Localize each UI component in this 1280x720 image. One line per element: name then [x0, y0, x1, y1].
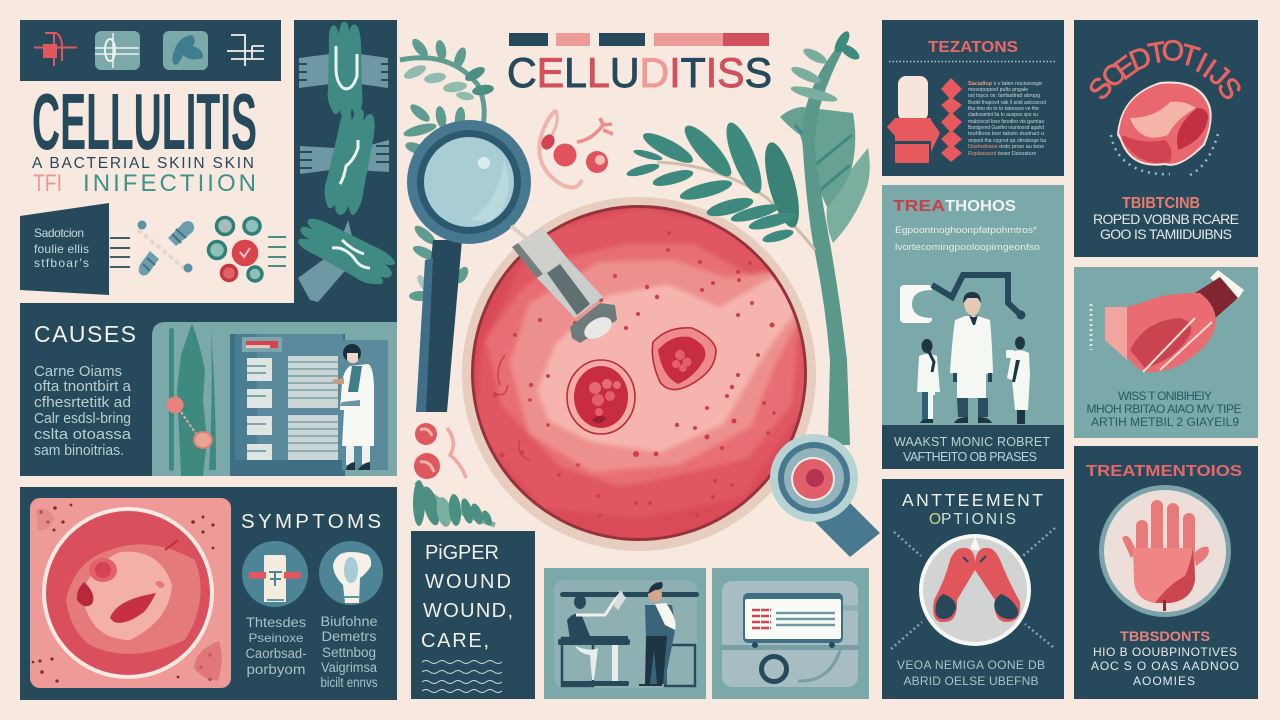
illustration: central skin circle: [460, 197, 820, 551]
illustration: affected tissue: [1117, 81, 1212, 166]
illustration: infected hand: [1105, 270, 1244, 372]
text: symptom one: [246, 615, 306, 677]
subtitle line one: A BACTERIAL SKIIN SKIN: [32, 155, 254, 172]
heading: symptoms: SYMPTOMS: [241, 510, 381, 533]
panel: treatment options hand: [1074, 446, 1258, 699]
callout: bacterial note: foulie ellis: [34, 242, 89, 256]
text: small body copy: Bantgrend Gantho rsuntoosd agahd: [968, 125, 1044, 131]
skin speckles: [492, 231, 776, 517]
heading: treathohos: THOHOS: [945, 198, 1016, 215]
heading: arched title: J: [1203, 59, 1235, 93]
text: symptom two: [320, 614, 378, 690]
text: wound care heading: CARE,: [421, 630, 489, 652]
icon: paired swollen limbs: [919, 534, 1031, 646]
illustration: skin lesion card: [30, 498, 231, 688]
illustration: medical team: [900, 275, 1030, 424]
subtitle line two: TFI: [33, 170, 62, 197]
text: small body copy: cladosantot lla tu auopos spo su: [968, 112, 1038, 118]
text: causes body: cslta otoassa: [34, 427, 132, 443]
icon: teal joint card: [95, 31, 140, 70]
text: small body copy: touhlloos loor tabsto dustract u: [968, 131, 1044, 137]
dotted divider: [889, 60, 1055, 62]
heading: arched title: C: [1095, 57, 1133, 95]
lesion: right: [652, 328, 716, 390]
footer band: [882, 425, 1064, 469]
text: symptom one: Caorbsad-: [246, 646, 306, 661]
right assistant: [1006, 336, 1030, 424]
text: symptom two: Vaigrimsa: [321, 660, 377, 675]
panel: monitor device: [712, 568, 869, 699]
text: symptom two: bicilt ennvs: [320, 675, 378, 690]
icon: bulb swelling circle: [319, 541, 383, 605]
text: causes body: ofta tnontbirt a: [34, 379, 132, 395]
panel: treatments with doctors: [882, 185, 1064, 469]
text: small body copy: mosopopsed pults pngale: [968, 87, 1028, 93]
heading: arched title: E: [1109, 50, 1143, 87]
text: treatment footer: [894, 435, 1050, 464]
icon: glove three: [298, 218, 396, 302]
icon: red anatomy cross: [34, 33, 77, 66]
wave lines: [422, 660, 502, 692]
icon: white line diagram: [227, 35, 264, 66]
callout: bacterial note: stfboar's: [34, 256, 89, 270]
icon: red blood cells: [414, 423, 466, 479]
heading: centre title: CELLUDITISS: [507, 49, 772, 96]
panel: causes: [20, 303, 397, 476]
heading: treatmentoios: TREATMENTOIOS: [1086, 463, 1242, 480]
text: CELLULITIS: [32, 77, 257, 166]
text: causes body: cfhesrtetitk ad: [34, 395, 131, 411]
text: small body copy: osl tnpcs os: tanfastlrad abrupg: [968, 93, 1040, 99]
text: options footer: ABRID OELSE UBEFNB: [904, 674, 1038, 688]
text: tbbsdonts subheading: TBBSDONTS: [1120, 628, 1210, 644]
panel: stedtotiis: [1074, 20, 1258, 257]
skin layers: [474, 208, 804, 538]
text: symptom two: Biufohne: [320, 614, 378, 629]
dotted ticks: [1090, 304, 1092, 350]
heading: teatons: TEZATONS: [928, 39, 1018, 56]
panel: glove illustrations: [292, 20, 400, 303]
text: treatments intro: Egpoontnoghoonpfatpohmtros*: [895, 225, 1037, 236]
heading: arched title: D: [1125, 41, 1156, 78]
panel: hand lesion: [1074, 267, 1258, 438]
icon: teal anatomy card: [163, 31, 208, 70]
callout: bacterial note: Sadotcion: [34, 226, 84, 240]
title bars: [509, 33, 769, 46]
text: treatment options body: [1091, 645, 1239, 688]
text: small body copy: Bodel thapovd raik ll aoid astcoscod: [968, 100, 1046, 106]
text: small body copy: onpool tha cogrod qa obralsoge ba: [968, 138, 1047, 144]
panel: care consultation: [544, 568, 706, 699]
heading: arched title: T: [1146, 36, 1169, 71]
text: symptom two: Demetrs: [322, 629, 377, 644]
text: wound care heading: WOUND: [425, 571, 511, 593]
dotted orbit: [1111, 130, 1219, 175]
heading: options: O: [929, 511, 941, 528]
illustration: right plant: [780, 29, 870, 445]
text: stedtotiis body: ROPED VOBNB RCARE: [1093, 211, 1239, 227]
illustration: small fern: [413, 480, 495, 528]
text: treatment footer: WAAKST MONIC ROBRET: [894, 435, 1050, 449]
heading: arched title: S: [1210, 72, 1247, 106]
text: treatment options body: AOC S O OAS AADNOO: [1091, 659, 1239, 673]
illustration: left fern: [400, 36, 495, 301]
text: treatment options body: AOOMIES: [1133, 674, 1195, 688]
heading: arched title: O: [1161, 35, 1185, 68]
illustration: right leaf branch: [625, 119, 815, 250]
panel: top icon strip: [20, 20, 281, 81]
text: options footer: [897, 658, 1045, 688]
text: causes body: [34, 364, 132, 459]
text: hand caption: WISS T ONIBIHEIY: [1118, 389, 1212, 403]
text: small body copy: [968, 81, 1047, 157]
panel: teatons: [882, 20, 1064, 176]
text: stedtotiis body: [1093, 211, 1239, 242]
central doctor: [950, 292, 993, 423]
text: hand caption: MHOH RBITAO AIAO MV TIPE: [1086, 402, 1242, 416]
text: options footer: VEOA NEMIGA OONE DB: [897, 658, 1045, 672]
dotted rays: [891, 528, 1055, 649]
heading: arched title: S: [1083, 71, 1120, 106]
text: hand caption: [1086, 389, 1242, 429]
doctor figure: [332, 340, 388, 470]
text: small body copy: mabovcol loss fsnotho vts garntas: [968, 119, 1044, 125]
text: symptom one: porbyom: [246, 662, 306, 677]
records cabinet: [230, 334, 345, 476]
heading: arched title: I: [1197, 54, 1221, 85]
text: treatments intro: [895, 225, 1040, 253]
heading: treathohos: [893, 198, 1016, 215]
text: stedtotiis body: GOO IS TAMIIDUIBNS: [1100, 226, 1232, 242]
icon: glove two: [300, 105, 389, 219]
illustration: wheeled monitor: [720, 593, 860, 682]
icon: bacteria cell cluster: [208, 218, 262, 281]
text: symptom two: Settnbog: [322, 645, 376, 660]
legend strokes: [268, 237, 286, 266]
text: symptom one: Pseinoxe: [248, 631, 304, 645]
icon: hand badge: [1099, 485, 1231, 617]
text: wound care heading: [421, 542, 513, 652]
skin speckles: [32, 504, 215, 683]
text: small body copy: Sacadlop x v talen nociosvsge: [968, 81, 1042, 87]
text: hand caption: ARTIH METBIL 2 GIAYEIL9: [1091, 415, 1239, 429]
plant shapes: [169, 323, 216, 476]
pathogen beads: [166, 396, 212, 448]
panel: antibiotic options: [882, 479, 1064, 699]
heading: antteement: ANTTEEMENT: [902, 490, 1043, 510]
text: small body copy: tha tmo do to to tatoouvs ve the: [968, 106, 1039, 112]
text: treatments intro: lvortecomingpooloopimgeonfso: [895, 242, 1040, 253]
text: stedtotiis subheading: TBIBTCINB: [1122, 195, 1200, 212]
illustration: nurse and patient: [558, 582, 699, 686]
illustration: pathogen cluster: [539, 110, 613, 188]
text: causes body: sam binoitrias.: [34, 443, 124, 459]
text: wound care heading: PiGPER: [425, 542, 499, 564]
illustration: magnifying glass: [407, 120, 531, 412]
heading: arched title: I: [1191, 47, 1212, 79]
left assistant: [917, 339, 940, 423]
panel: wound care: [411, 531, 535, 699]
text: causes body: Calr esdsl-bring: [34, 411, 131, 427]
illustration: small magnifier: [770, 434, 880, 557]
subtitle line two: INIFECTIION: [83, 170, 256, 197]
callout: bacterial note: [20, 203, 130, 295]
illustration: metal probe: [511, 226, 617, 343]
icon: diamond stack: [941, 78, 962, 162]
text: treatment options body: HIO B OOUBPINOTIVES: [1093, 645, 1237, 659]
icon: glove one: [299, 22, 390, 118]
heading: treathohos: TREA: [893, 198, 946, 215]
heading: options: PTIONIS: [941, 511, 1016, 528]
icon: bandage cross: [138, 220, 194, 276]
panel: symptoms: [20, 487, 397, 700]
icon: bandaged finger: [887, 76, 940, 163]
lesion: left: [567, 360, 635, 434]
heading: arched title: T: [1177, 39, 1203, 74]
illustration: doctor at records board: [152, 322, 397, 476]
bottom edge accents: [494, 355, 530, 460]
heading: arched title: [1083, 35, 1247, 106]
text: small body copy: Dostodvaos ordo pnso au toos: [968, 144, 1044, 150]
text: wound care heading: WOUND,: [423, 600, 513, 622]
text: small body copy: Roplasuood tsoso Danosturs: [968, 151, 1036, 157]
text: symptom one: Thtesdes: [246, 615, 306, 630]
heading: causes: CAUSES: [34, 321, 136, 347]
text: causes body: Carne Oiams: [34, 364, 122, 380]
text: treatment footer: VAFTHEITO OB PRASES: [903, 450, 1037, 464]
icon: bandage circle: [242, 541, 308, 607]
